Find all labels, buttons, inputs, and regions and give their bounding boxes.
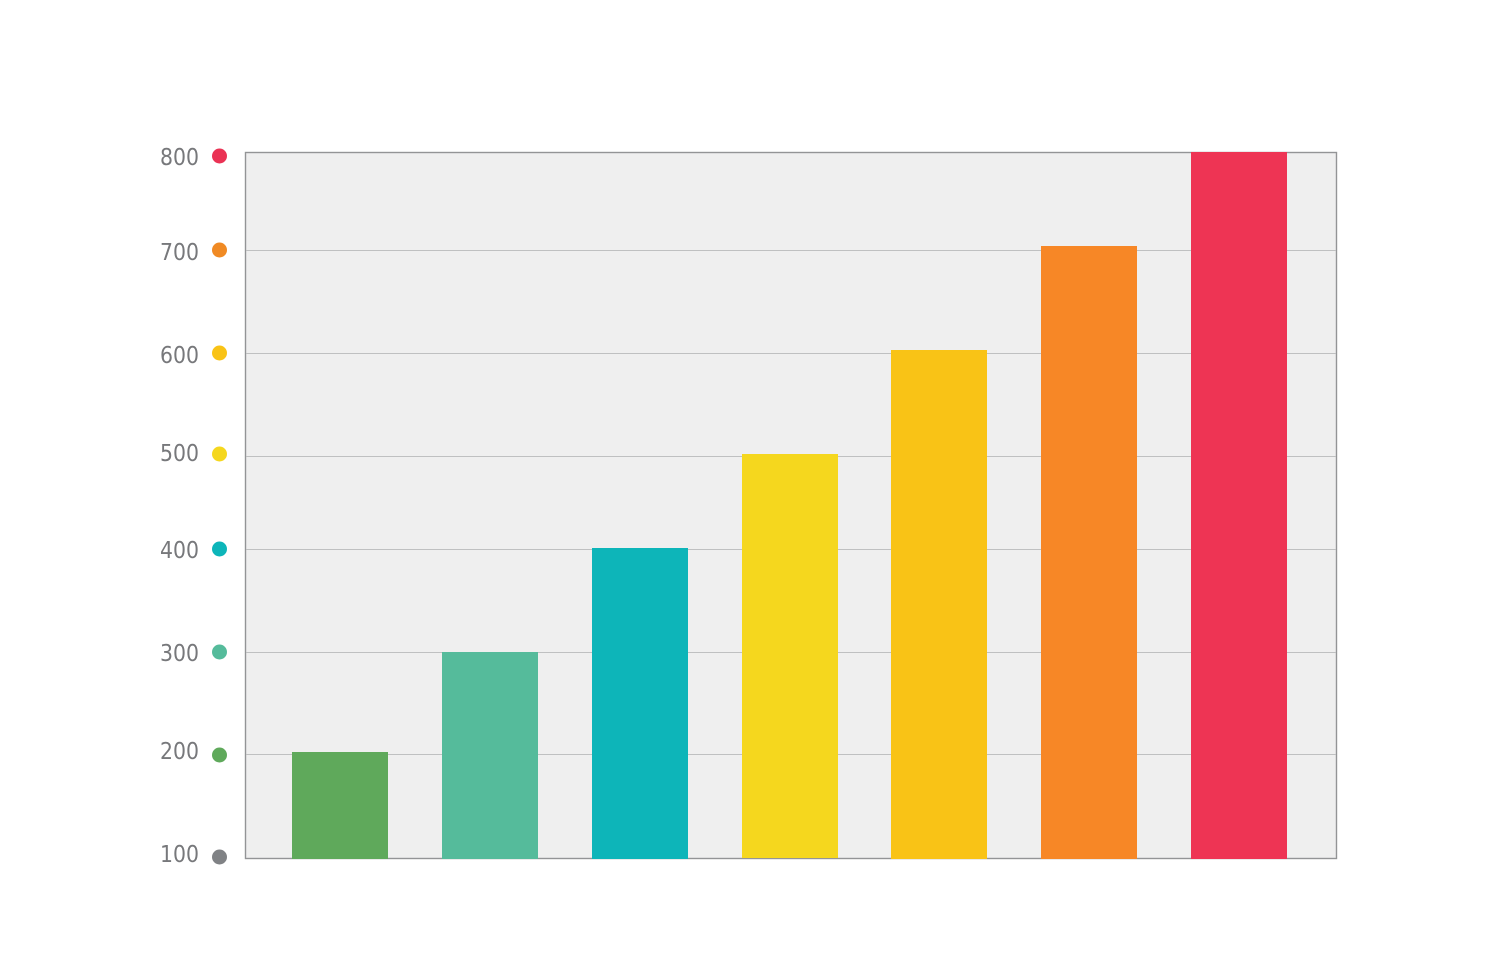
y-axis labels: 700 [160,240,199,266]
bar: 800 red [1191,152,1287,859]
y-axis labels: 200 [160,739,199,765]
y-axis labels: 600 [160,343,199,369]
y-axis labels: 100 [160,842,199,868]
bar: 400 teal [592,548,688,859]
y-axis labels: 400 [160,538,199,564]
bar: 200 green [292,752,388,859]
bar: 500 yellow [742,454,838,858]
bar: 300 sea green [442,652,538,859]
y-axis labels: 300 [160,641,199,667]
bars [292,152,1287,859]
y-axis labels: 800 [160,145,199,171]
bar: 700 orange [1041,246,1137,859]
legend dots [212,148,227,864]
y-axis labels [160,145,199,868]
panel: plot background [246,152,1336,858]
y-axis labels: 500 [160,441,199,467]
bar: 600 amber [891,350,987,859]
